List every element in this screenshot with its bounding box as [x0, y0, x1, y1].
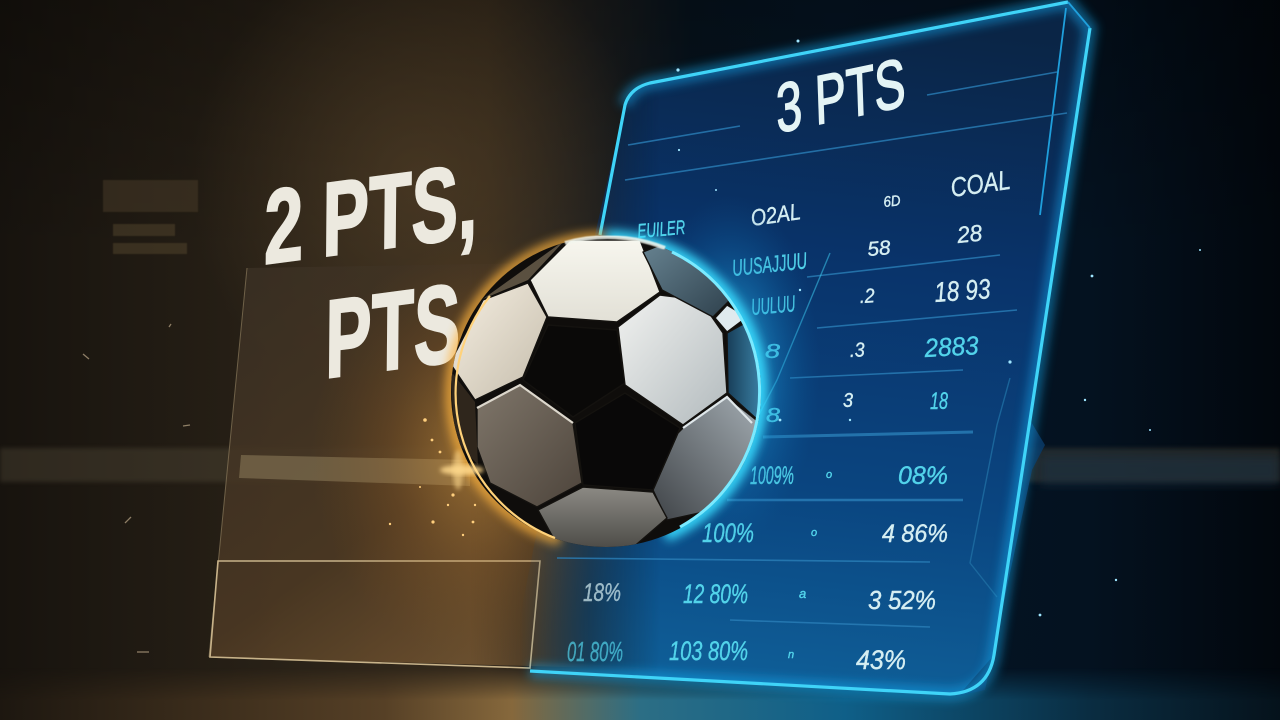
sparks: orange — [389, 418, 484, 536]
table: goal statistics: 4 86% — [882, 520, 948, 548]
table: goal statistics: 8 — [766, 405, 780, 427]
board row lines — [557, 72, 1067, 627]
table: goal statistics: n — [788, 649, 794, 661]
table: goal statistics: COAL — [949, 165, 1012, 203]
table: goal statistics: 08% — [898, 462, 948, 490]
table: goal statistics: 3 52% — [868, 585, 936, 615]
table: goal statistics: 18 93 — [933, 273, 992, 308]
heading: 3 PTS: 3 PTS — [775, 43, 907, 148]
table: goal statistics: 3 — [843, 390, 853, 412]
table: goal statistics: 18% — [583, 579, 621, 607]
floor strip — [24, 671, 1280, 720]
board neon outer glow — [530, 2, 1090, 694]
panel: 2 points board — [209, 262, 600, 668]
table: goal statistics: 8 — [765, 341, 780, 363]
board surface — [211, 268, 568, 666]
ball base — [451, 237, 761, 547]
board corner line — [1040, 2, 1090, 215]
table: goal statistics: 18 — [930, 388, 948, 415]
icon: soccer ball — [450, 237, 765, 550]
ball rim top — [565, 237, 665, 248]
table: goal statistics: 01 80% — [567, 636, 623, 667]
glow: blue around ball — [640, 195, 820, 545]
heading: PTS: PTS — [325, 261, 461, 402]
table: goal statistics: a — [799, 586, 806, 601]
ghost scoreboard block — [103, 180, 198, 254]
table: goal statistics: .3 — [849, 339, 865, 362]
table: goal statistics: o — [826, 469, 832, 481]
table: goal statistics: UUSAJJUU — [731, 247, 808, 281]
ball rim right — [672, 252, 760, 527]
ball rim left — [456, 296, 555, 538]
board neon edge — [530, 2, 1090, 694]
glow: orange behind ball — [310, 240, 650, 660]
ball rim glow cyan — [606, 237, 760, 535]
table: goal statistics: 2883 — [923, 330, 980, 363]
table: goal statistics: O2AL — [749, 198, 802, 231]
heading: 2 PTS: 2 PTS, — [264, 141, 478, 287]
table: goal statistics: o — [811, 527, 817, 539]
table: goal statistics: 6D — [883, 192, 901, 211]
table: goal statistics: 103 80% — [669, 636, 748, 666]
board surface — [510, 2, 1090, 694]
table: goal statistics — [567, 165, 1012, 675]
panel: 3 points board — [510, 2, 1090, 696]
board bevel — [958, 420, 1045, 696]
board diagonal spark line — [750, 253, 830, 432]
sparks: faint left streaks — [83, 324, 190, 652]
table: goal statistics: EUILER — [637, 217, 686, 243]
table: goal statistics: 58 — [867, 237, 891, 261]
board lower frame — [210, 561, 540, 668]
ball rim glow orange — [451, 237, 606, 540]
ball highlights — [477, 385, 573, 423]
table: goal statistics: 100% — [702, 518, 754, 548]
sparks: dust particles — [676, 40, 1201, 616]
table: goal statistics: .2 — [859, 285, 875, 308]
ball patches — [450, 240, 765, 550]
table: goal statistics: 1009% — [750, 462, 794, 490]
board inner bevel panel — [970, 378, 1010, 597]
table: goal statistics: 28 — [955, 219, 984, 248]
table: goal statistics: UULUU — [750, 290, 796, 320]
table: goal statistics: 43% — [856, 645, 906, 675]
table: goal statistics: 12 80% — [683, 579, 748, 609]
